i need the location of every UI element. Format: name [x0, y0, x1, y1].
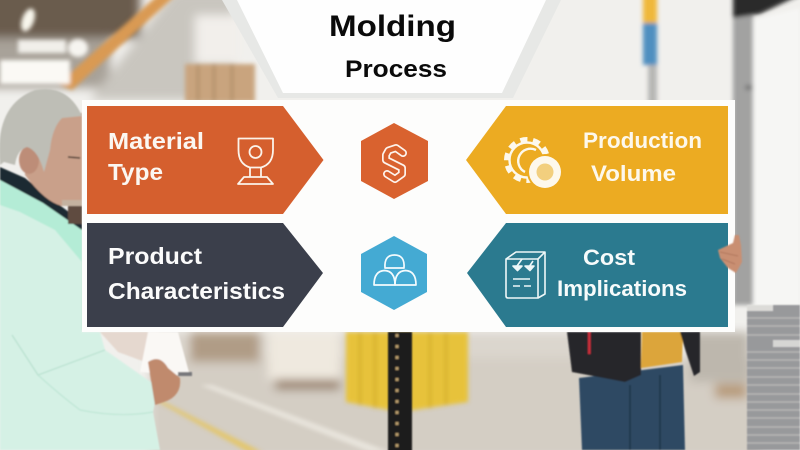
- person on left: worker in green coat: [0, 89, 192, 450]
- paper stacks: [747, 305, 800, 450]
- title line 1: Molding: [329, 10, 456, 43]
- label: material type: Material: [108, 128, 204, 154]
- icon: gears: [507, 140, 563, 190]
- label: production volume: [583, 128, 702, 186]
- hair: [0, 89, 82, 172]
- label: product characteristics: Product: [108, 243, 202, 269]
- label: production volume: Volume: [591, 161, 676, 186]
- panel: production volume: [466, 106, 728, 214]
- label: cost implications: [557, 245, 687, 301]
- hexagon: top centre: [361, 123, 428, 199]
- white board: [82, 100, 735, 332]
- label: product characteristics: [108, 243, 285, 304]
- title line 2: Process: [345, 56, 447, 83]
- panel: material type: [87, 106, 324, 214]
- panel: cost implications: [467, 223, 728, 327]
- hexagon: bottom centre: [361, 236, 427, 310]
- clipboard: [100, 332, 192, 376]
- title banner: [222, 0, 561, 98]
- label: production volume: Production: [583, 128, 702, 153]
- hand holding board: [718, 235, 742, 273]
- label: product characteristics: Characteristics: [108, 278, 285, 304]
- label: cost implications: Implications: [557, 276, 687, 301]
- face and neck: [25, 113, 82, 206]
- person on right: torso: [567, 332, 700, 450]
- icon: three domes: [374, 255, 416, 285]
- panel: product characteristics: [87, 223, 323, 327]
- hand: [148, 359, 180, 405]
- label: material type: Type: [108, 159, 163, 185]
- label: cost implications: Cost: [583, 245, 636, 270]
- icon: checklist box: [506, 252, 545, 298]
- icon: goblet: [238, 138, 273, 184]
- black post: [388, 332, 412, 450]
- icon: linked S: [386, 148, 403, 179]
- collar: [0, 167, 82, 230]
- label: material type: [108, 128, 204, 185]
- coat: [0, 180, 160, 450]
